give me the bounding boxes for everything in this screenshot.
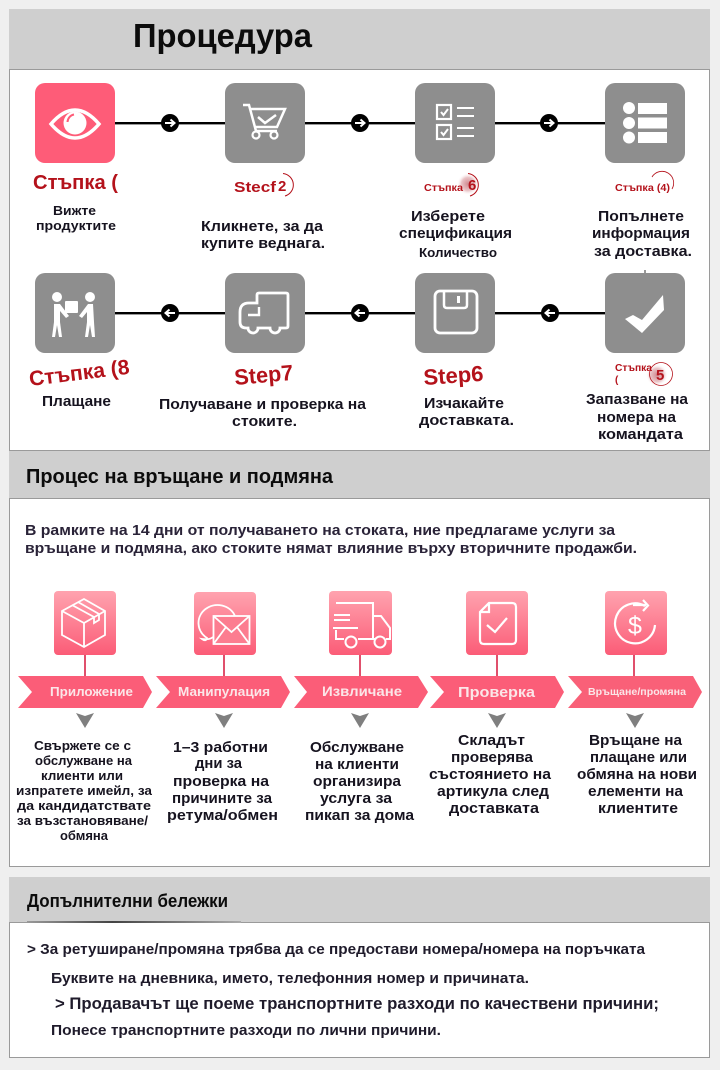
text: application [16, 738, 153, 843]
text: application: обслужване на [35, 753, 133, 768]
step label 5: 5 [656, 367, 664, 384]
step text 3: Изберете [411, 208, 485, 225]
text: handling [167, 739, 278, 824]
heading: additional notes: Допълнителни бележки [27, 891, 228, 911]
step label 5: ( [615, 375, 619, 386]
step: inspection [429, 591, 564, 817]
step text 3: Количество [419, 245, 497, 260]
step: return or exchange [568, 591, 702, 817]
text: handling: проверка на [173, 773, 270, 790]
notes text [27, 941, 659, 1039]
step text 4: за доставка. [594, 243, 692, 260]
text: inspection: проверява [451, 749, 534, 766]
step label 2 [234, 174, 293, 196]
intro text [25, 522, 637, 557]
text: inspection: състоянието на [429, 766, 552, 783]
step: pickup [294, 591, 428, 824]
text: application: клиенти или [41, 768, 123, 783]
step label 4 [615, 171, 674, 194]
text: pickup: на клиенти [315, 756, 399, 773]
notes text: Буквите на дневника, името, телефонния номер и причината. [51, 970, 529, 987]
icon: box [54, 591, 116, 655]
text: application: Свържете се с [34, 738, 131, 753]
text: return or exchange: клиентите [598, 800, 678, 817]
text: handling: ретума/обмен [167, 807, 278, 824]
step text 6 [419, 395, 514, 429]
notes text: > За ретуширане/промяна трябва да се предостави номера/номера на поръчката [27, 941, 646, 958]
step label 2: Stecf [234, 179, 277, 196]
text: return or exchange: Връщане на [589, 732, 683, 749]
notes text: Понесе транспортните разходи по лични причини. [51, 1022, 441, 1039]
text: pickup: организира [313, 773, 402, 790]
step text 7: стоките. [232, 413, 297, 430]
step label 3 [424, 173, 479, 196]
intro text: връщане и подмяна, ако стоките нямат влияние върху вторичните продажби. [25, 540, 637, 557]
step text 6: доставката. [419, 412, 514, 429]
step text 4: Попълнете [598, 208, 684, 225]
step: application: Приложение [50, 684, 133, 699]
text: inspection: Складът [458, 732, 525, 749]
panel: return and exchange [9, 451, 710, 866]
text: return or exchange: елементи на [588, 783, 684, 800]
text: application: за възстановяване/ [17, 813, 148, 828]
step text 7 [159, 396, 367, 430]
icon: eye [35, 83, 115, 163]
panel: procedure [9, 9, 710, 450]
step label 3: 6 [468, 177, 476, 194]
panel: additional notes [9, 877, 710, 1058]
step: handling [156, 592, 290, 824]
step text 2: купите веднага. [201, 235, 325, 252]
text: application: обмяна [60, 828, 109, 843]
notes text: > Продавачът ще поеме транспортните разходи по качествени причини; [55, 994, 659, 1013]
text: return or exchange [577, 732, 697, 817]
icon: form list [605, 83, 685, 163]
text: inspection [429, 732, 552, 817]
text: application: изпратете имейл, за [16, 783, 153, 798]
step: handling: Манипулация [178, 684, 270, 699]
step text 2 [201, 218, 325, 252]
step label 2: 2 [278, 178, 286, 195]
icon: check mark [605, 270, 685, 353]
step label 4: Стъпка (4) [615, 183, 670, 194]
text: handling: дни за [195, 755, 243, 772]
text: application: да кандидатствате [17, 798, 151, 813]
icon: refund [605, 591, 667, 655]
step text 8: Плащане [42, 393, 111, 410]
text: handling: причините за [172, 790, 273, 807]
step label 5: Стъпка [615, 363, 652, 374]
icon: truck [329, 591, 392, 655]
text: return or exchange: плащане или [590, 749, 687, 766]
step text 6: Изчакайте [424, 395, 504, 412]
heading: return process: Процес на връщане и подмяна [26, 466, 334, 488]
text: inspection: артикула след [437, 783, 549, 800]
step: inspection: Проверка [458, 684, 536, 701]
step label 3: Стъпка [424, 183, 463, 194]
step text 5 [586, 391, 689, 443]
icon: document check [466, 591, 528, 655]
icon: save [415, 273, 495, 353]
step label 8: Стъпка (8 [28, 356, 131, 391]
step label 6: Step6 [423, 361, 484, 390]
step text 1 [36, 203, 116, 233]
step text 3: спецификация [399, 225, 512, 242]
text: pickup [305, 739, 415, 824]
step: return or exchange: Връщане/промяна [588, 687, 686, 698]
step label 5 [615, 362, 672, 386]
step text 5: Запазване на [586, 391, 689, 408]
icon: message and envelope [194, 592, 256, 655]
connector row 1 [115, 114, 605, 132]
text: pickup: пикап за дома [305, 807, 415, 824]
text: return or exchange: обмяна на нови [577, 766, 697, 783]
connector row 2 [115, 304, 605, 322]
step text 2: Кликнете, за да [201, 218, 324, 235]
intro text: В рамките на 14 дни от получаването на стоката, ние предлагаме услуги за [25, 522, 616, 539]
text: pickup: Обслужване [310, 739, 404, 756]
step text 5: командата [598, 426, 684, 443]
step text 7: Получаване и проверка на [159, 396, 367, 413]
step: pickup: Извличане [322, 683, 402, 699]
step text 1: Вижте [53, 203, 96, 218]
title: Процедура [133, 17, 313, 54]
step text 4: информация [592, 225, 690, 242]
icon: payment handover [35, 273, 115, 353]
step: return or exchange: $ [628, 612, 642, 640]
step text 1: продуктите [36, 218, 116, 233]
icon: cart [225, 83, 305, 163]
step label 1: Стъпка ( [33, 172, 118, 194]
step: application [16, 591, 153, 843]
text: inspection: доставката [449, 800, 540, 817]
text: handling: 1–3 работни [173, 739, 268, 756]
step text 5: номера на [597, 409, 677, 426]
icon: checklist [415, 83, 495, 163]
step text 3 [399, 208, 512, 260]
step label 7: Step7 [233, 360, 294, 390]
step text 4 [592, 208, 692, 260]
icon: delivery truck [225, 273, 305, 353]
text: pickup: услуга за [320, 790, 393, 807]
